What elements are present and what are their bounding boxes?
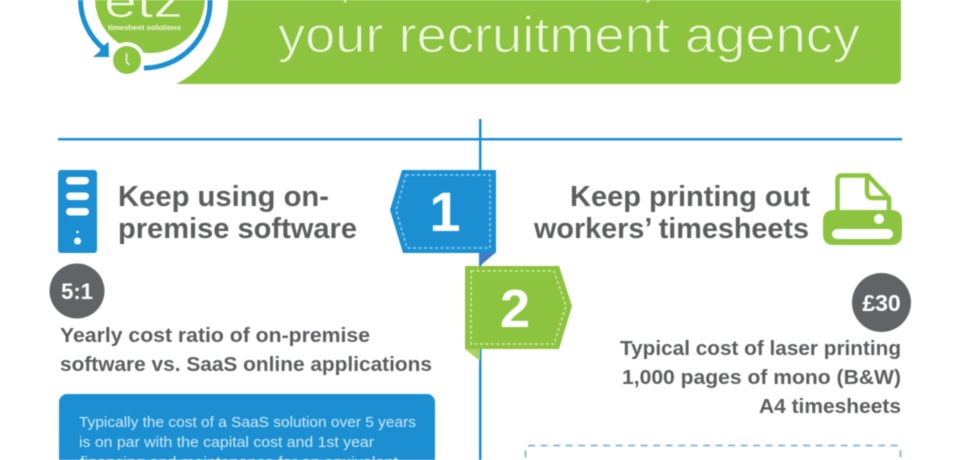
badge 2: 2 [500,279,530,339]
stat circle 5:1: 5:1 [61,279,93,304]
heading: on-premise software [118,181,357,245]
panel: SaaS cost note: Typically the cost of a SaaS solution over 5 years [79,415,416,431]
heading: on-premise software: Keep using on- [118,181,329,213]
badge 1 [390,170,496,266]
stat text: printing cost: Typical cost of laser printing [620,338,901,360]
stat circle £30: £30 [862,290,901,316]
logo: timesheet solutions [108,23,181,32]
stat text: printing cost: A4 timesheets [759,396,901,418]
badge 2 [465,266,572,361]
stat text: printing cost: 1,000 pages of mono (B&W) [622,367,901,389]
panel: SaaS cost note [59,394,435,460]
title text: your recruitment agency [278,7,860,63]
heading: printing timesheets [533,181,810,245]
vertical timeline [479,119,482,460]
heading: on-premise software: premise software [118,213,357,245]
stat text: cost ratio: software vs. SaaS online applications [60,354,432,376]
panel: SaaS cost note: is on par with the capital cost and 1st year [79,435,374,451]
panel: dashed note [526,446,900,460]
title banner [176,0,901,84]
heading: printing timesheets: workers’ timesheets [533,213,809,245]
stat text: cost ratio: Yearly cost ratio of on-premise [60,325,370,347]
stat circle 5:1 [50,264,104,318]
icon: server [58,170,97,253]
icon: printer [823,176,902,245]
heading: printing timesheets: Keep printing out [570,181,810,213]
badge 1: 1 [429,180,461,243]
logo [80,0,210,78]
stat text: printing cost [620,338,901,418]
stat text: cost ratio [60,325,432,376]
stat circle £30 [852,273,911,332]
horizontal divider [58,138,902,140]
